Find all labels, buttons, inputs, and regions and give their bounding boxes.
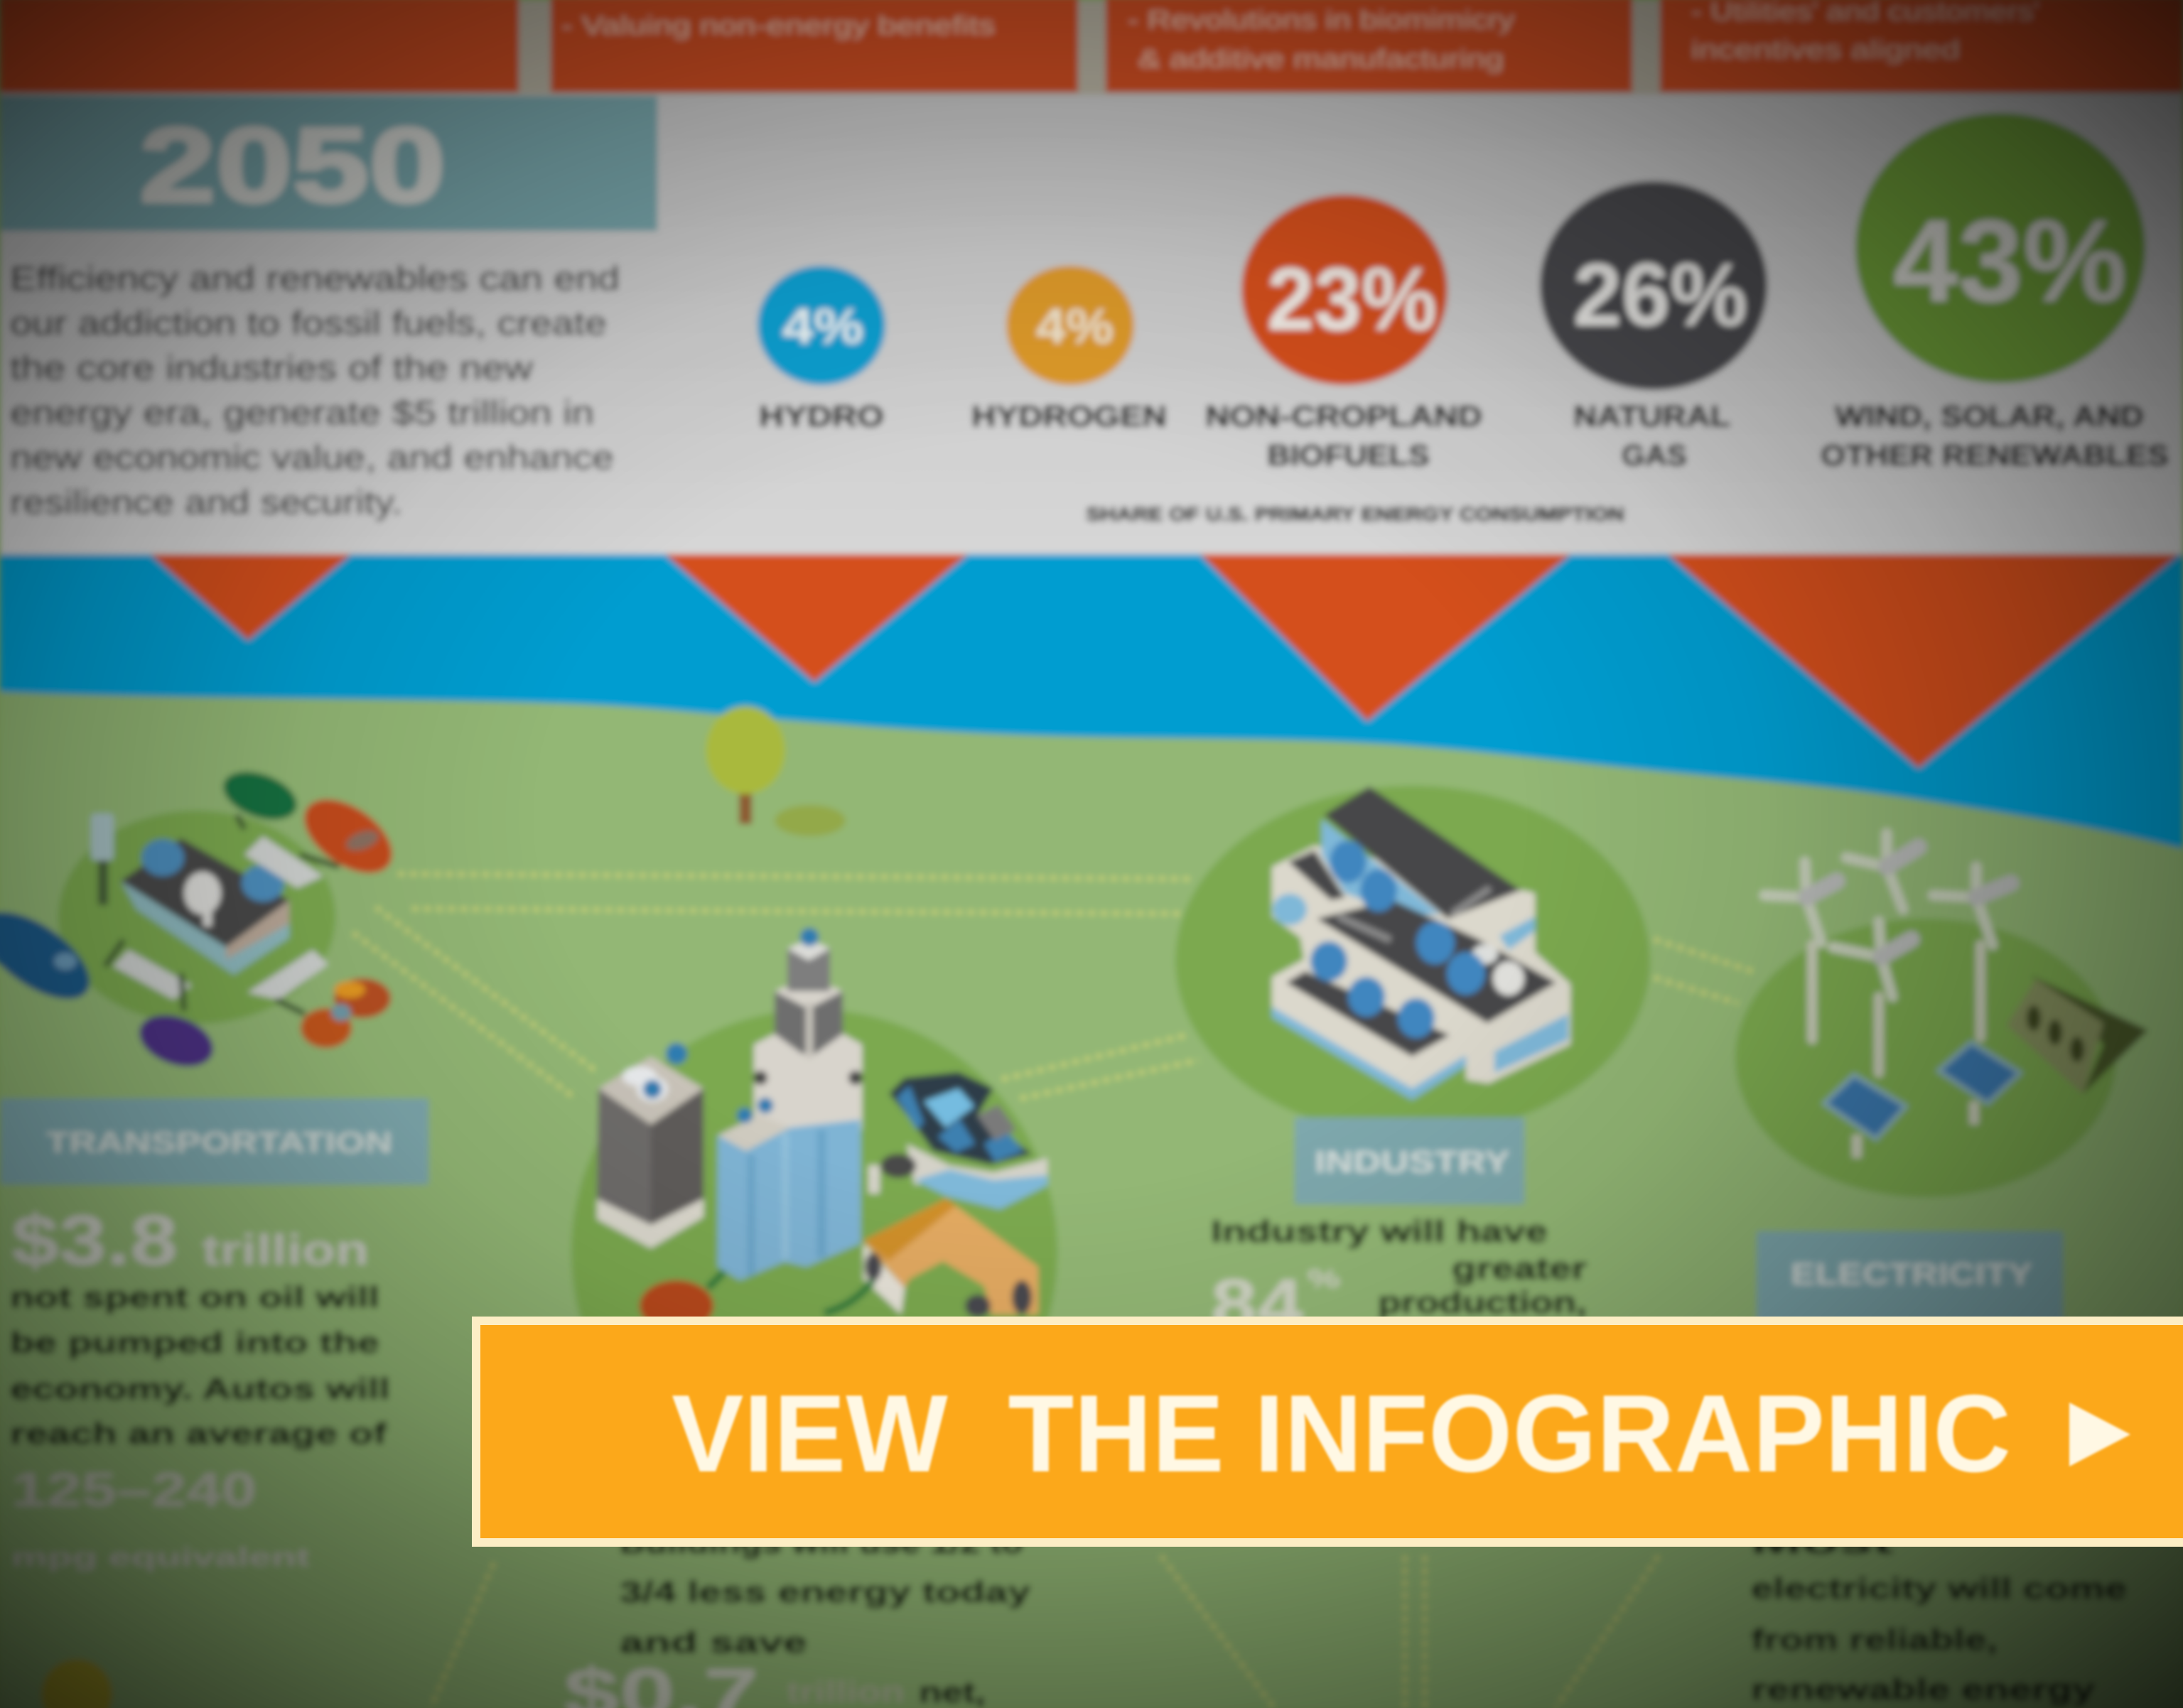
text block: buildings savings: and save bbox=[620, 1626, 807, 1659]
panel: top orange strip: - Valuing non-energy benefits bbox=[561, 11, 995, 40]
panel: water band bbox=[0, 547, 2183, 860]
chart: natural gas share: GAS bbox=[1622, 438, 1687, 472]
text block: buildings savings: Buildings will use 1/2 to bbox=[620, 1526, 1023, 1560]
text block: electricity sources: Most bbox=[1751, 1526, 1893, 1560]
icon: battery storage bbox=[2007, 975, 2148, 1094]
chart: hydro share: HYDRO bbox=[759, 399, 884, 433]
chart: wind, solar and other renewables share: OTHER RENEWABLES bbox=[1821, 438, 2169, 472]
label: electricity bbox=[1757, 1231, 2063, 1324]
arrows: orange downward pointers bbox=[151, 554, 2179, 768]
icon: play arrow bbox=[2069, 1402, 2130, 1466]
icon: charging sign bbox=[91, 814, 114, 905]
chart: wind, solar and other renewables share bbox=[1821, 113, 2169, 472]
chart: hydrogen share: HYDROGEN bbox=[971, 399, 1167, 433]
chart: hydrogen share: 4% bbox=[1036, 298, 1114, 354]
icon: blue glass tower bbox=[718, 1098, 861, 1280]
charging cords bbox=[105, 815, 339, 1014]
text block: scenario summary: energy era, generate $5 trillion in bbox=[10, 394, 594, 431]
icon: factory roof details bbox=[1338, 888, 1524, 995]
text block: transportation savings: be pumped into the bbox=[10, 1326, 379, 1359]
text block: scenario summary: resilience and security. bbox=[10, 483, 402, 521]
heading box: 2050 bbox=[0, 96, 657, 231]
label: transportation bbox=[0, 1098, 428, 1184]
icon: charging pads bbox=[113, 836, 328, 1000]
label: transportation: TRANSPORTATION bbox=[46, 1125, 392, 1159]
heading box: 2050: 2050 bbox=[139, 105, 446, 225]
chart: non-cropland biofuels share: BIOFUELS bbox=[1267, 438, 1430, 472]
panel: top orange strip: incentives aligned bbox=[1691, 35, 1960, 64]
illustration: wind and solar farm bbox=[1735, 833, 2148, 1197]
label: industry: INDUSTRY bbox=[1315, 1145, 1510, 1179]
panel: top orange strip bbox=[0, 0, 2183, 96]
text block: buildings savings bbox=[564, 1526, 1031, 1708]
text block: scenario summary: the core industries of the new bbox=[10, 349, 534, 387]
chart: non-cropland biofuels share: NON-CROPLAND bbox=[1205, 399, 1482, 433]
text block: electricity sources: from reliable, bbox=[1751, 1623, 1998, 1656]
text block: transportation savings bbox=[10, 1201, 390, 1572]
text block: scenario summary: our addiction to fossil fuels, create bbox=[10, 304, 607, 342]
text block: electricity sources: electricity will come bbox=[1751, 1572, 2127, 1605]
chart: non-cropland biofuels share bbox=[1205, 195, 1482, 472]
chart: natural gas share: NATURAL bbox=[1573, 399, 1730, 433]
chart: hydro share: 4% bbox=[782, 298, 863, 354]
icon: grey office building bbox=[597, 1043, 704, 1248]
banner text: VIEW THE INFOGRAPHIC bbox=[672, 1372, 2011, 1495]
text block: transportation savings: reach an average of bbox=[10, 1417, 387, 1450]
icon: tree bbox=[706, 706, 846, 836]
illustration: transportation hub bbox=[0, 762, 405, 1076]
text block: transportation savings: not spent on oil will bbox=[10, 1280, 379, 1314]
text block: scenario summary: Efficiency and renewables can end bbox=[10, 259, 620, 297]
icon: charging station building bbox=[121, 838, 289, 975]
chart: wind, solar and other renewables share: WIND, SOLAR, AND bbox=[1835, 399, 2144, 433]
icon: factory cream structure bbox=[1272, 845, 1570, 1098]
text block: industry gains: 84 bbox=[1211, 1265, 1303, 1344]
text block: transportation savings: mpg equivalent bbox=[11, 1542, 310, 1572]
icon: city car bbox=[640, 1280, 713, 1331]
text block: scenario summary bbox=[10, 259, 620, 521]
chart caption: SHARE OF U.S. PRIMARY ENERGY CONSUMPTION bbox=[1086, 503, 1624, 525]
power lines bbox=[353, 874, 1752, 1708]
text block: industry gains: % bbox=[1308, 1264, 1340, 1293]
chart: hydro share bbox=[758, 266, 885, 433]
panel: green land bbox=[0, 692, 2183, 1708]
text block: industry gains bbox=[1211, 1214, 1587, 1344]
icon: wind turbines bbox=[1764, 833, 2011, 1073]
label: electricity: ELECTRICITY bbox=[1791, 1257, 2032, 1292]
panel: top orange strip: - Revolutions in biomimicry bbox=[1128, 5, 1514, 34]
text block: industry gains: greater bbox=[1452, 1251, 1587, 1286]
icon: small orange car bbox=[301, 978, 391, 1048]
chart: hydrogen share bbox=[971, 266, 1167, 433]
icon: solar panels bbox=[1824, 1042, 2020, 1158]
text block: scenario summary: new economic value, and enhance bbox=[10, 438, 614, 476]
text block: buildings savings: 3/4 less energy today bbox=[620, 1575, 1031, 1609]
text block: transportation savings: $3.8 bbox=[11, 1201, 178, 1280]
text block: electricity sources: renewable energy bbox=[1751, 1672, 2096, 1706]
call to action banner bbox=[476, 1321, 2183, 1542]
text block: transportation savings: 125–240 bbox=[11, 1463, 257, 1517]
icon: green car bbox=[217, 762, 303, 829]
label: industry bbox=[1295, 1118, 1524, 1204]
chart: non-cropland biofuels share: 23% bbox=[1267, 250, 1437, 349]
text block: electricity sources bbox=[1751, 1526, 2127, 1706]
text block: buildings savings: net, bbox=[919, 1675, 986, 1708]
icon: factory skylights bbox=[1310, 841, 1485, 1038]
icon: factory dark roofs bbox=[1286, 787, 1556, 1056]
chart: wind, solar and other renewables share: 43% bbox=[1893, 195, 2127, 326]
panel: top orange strip: & additive manufacturing bbox=[1138, 44, 1504, 73]
icon: factory blue walls bbox=[1272, 819, 1568, 1100]
text block: industry gains: Industry will have bbox=[1211, 1214, 1548, 1249]
text block: industry gains: production, bbox=[1378, 1285, 1587, 1320]
icon: blue van bbox=[0, 895, 104, 1016]
icon: orange roof house bbox=[863, 1199, 1038, 1317]
chart: natural gas share: 26% bbox=[1573, 246, 1747, 345]
icon: low-rise building bbox=[868, 1072, 1047, 1209]
chart: natural gas share bbox=[1540, 181, 1767, 472]
icon: bottom left tree top bbox=[41, 1659, 112, 1708]
panel: 2050 scenario bbox=[0, 94, 2183, 554]
icon: tall tower bbox=[753, 928, 863, 1130]
icon: orange car bbox=[291, 784, 405, 888]
illustration: industrial complex bbox=[1175, 786, 1650, 1135]
illustration: city buildings bbox=[571, 928, 1057, 1496]
icon: purple car bbox=[132, 1006, 220, 1076]
icon: green cords bbox=[708, 1272, 873, 1313]
text block: transportation savings: economy. Autos will bbox=[10, 1372, 390, 1405]
text block: transportation savings: trillion bbox=[202, 1226, 369, 1274]
